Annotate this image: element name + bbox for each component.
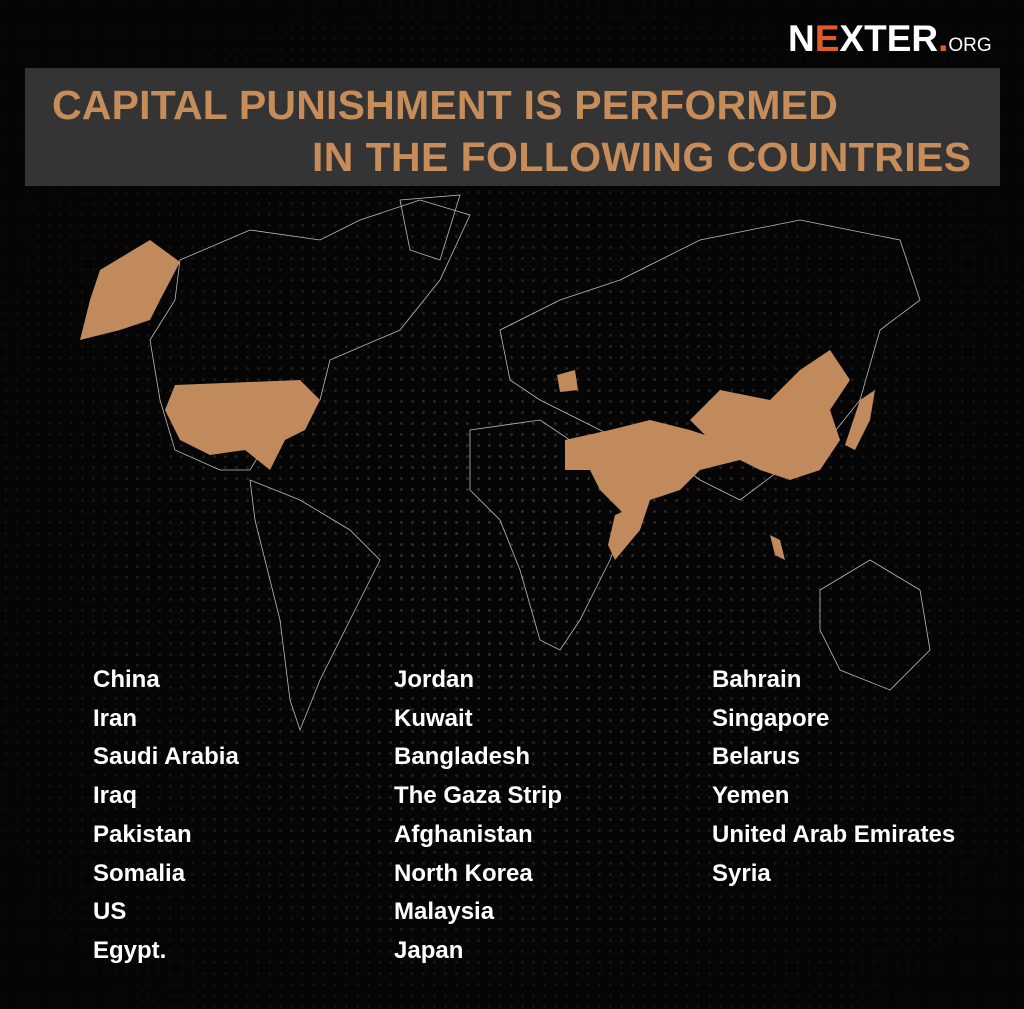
country list column 2: North Korea [394,860,533,887]
country list column 1: Egypt. [93,937,166,964]
country list column 2: Bangladesh [394,743,530,770]
country list column 2: Afghanistan [394,821,533,848]
country list column 3: United Arab Emirates [712,821,955,848]
highlight: Belarus [557,370,578,392]
highlight: Alaska [80,240,180,340]
country list column 1: Iran [93,705,137,732]
highlight: Somalia [608,500,650,560]
country list column 3 [712,666,955,887]
highlight: middle east [565,420,740,520]
country list column 1: China [93,666,160,693]
title [25,68,1000,186]
country list column 2: Kuwait [394,705,473,732]
country list column 2: The Gaza Strip [394,782,562,809]
country list column 3: Bahrain [712,666,801,693]
country list column 2: Jordan [394,666,474,693]
country list column 1 [93,666,239,964]
world map [80,194,930,731]
country list column 2 [394,666,562,964]
country list column 3: Syria [712,860,771,887]
title: IN THE FOLLOWING COUNTRIES [312,134,972,180]
country list column 3: Singapore [712,705,829,732]
highlight: Malaysia [770,535,785,560]
country list column 1: Saudi Arabia [93,743,239,770]
country list column 1: Somalia [93,860,185,887]
country list column 2: Malaysia [394,898,494,925]
highlight: Japan [845,390,875,450]
country list column 1: Pakistan [93,821,192,848]
country list column 3: Yemen [712,782,789,809]
highlight: China [690,350,850,480]
highlight: US [165,380,320,470]
country list column 1: US [93,898,126,925]
country list column 1: Iraq [93,782,137,809]
country list column 2: Japan [394,937,463,964]
title: CAPITAL PUNISHMENT IS PERFORMED [52,82,838,128]
logo: NEXTER.ORG [788,18,992,59]
country list column 3: Belarus [712,743,800,770]
